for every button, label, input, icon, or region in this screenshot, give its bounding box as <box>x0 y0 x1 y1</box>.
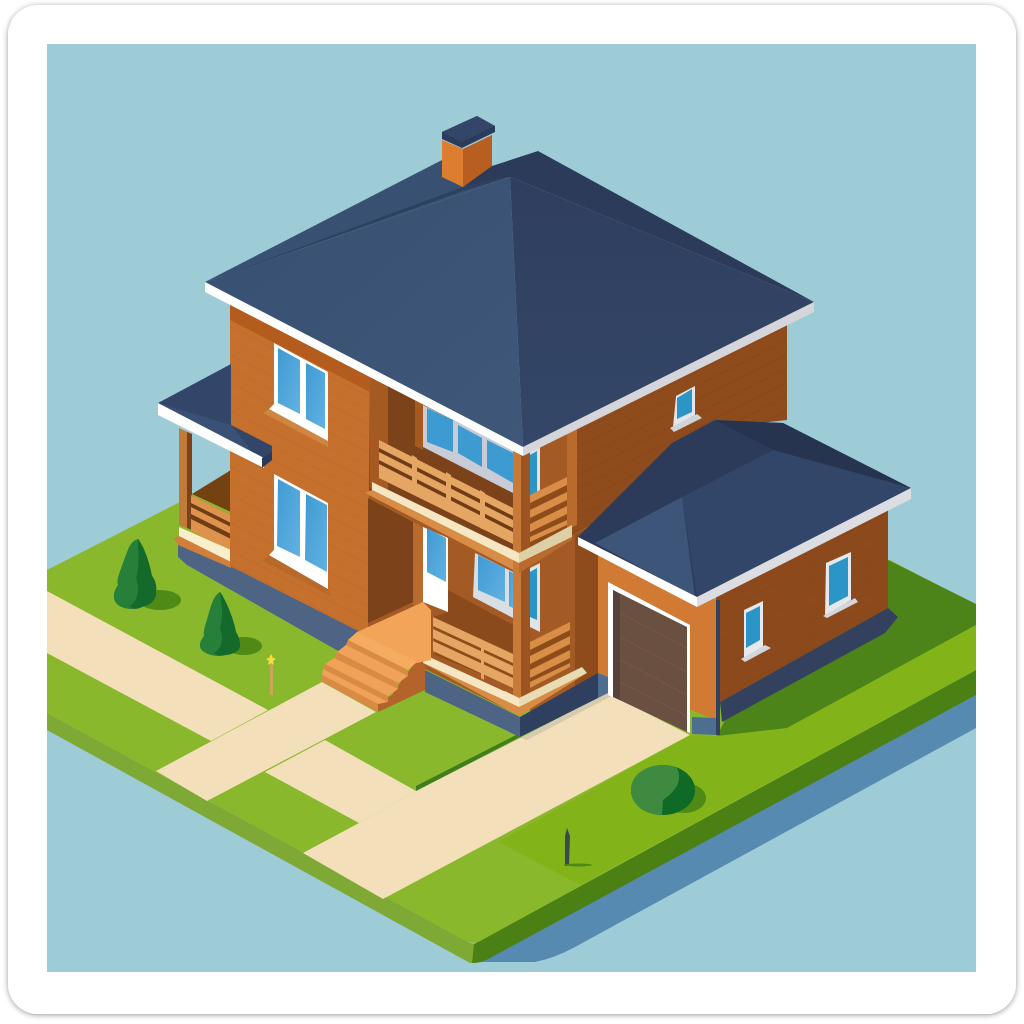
garage foundation <box>692 717 716 735</box>
porch railing <box>191 495 231 552</box>
lower porch railing <box>433 617 513 688</box>
background porch interior <box>192 470 231 512</box>
recess dark entry wall <box>368 498 413 623</box>
front lawn stake <box>564 828 592 866</box>
left wall <box>230 298 370 636</box>
balcony floor <box>365 482 519 573</box>
porch post <box>179 428 192 530</box>
right balcony railing <box>530 477 567 542</box>
garage side wall <box>716 505 888 702</box>
porch post and railing <box>174 428 231 568</box>
lower door <box>423 527 448 612</box>
garage door <box>608 582 690 733</box>
front right slope <box>510 177 814 447</box>
right upper wall siding <box>530 320 787 555</box>
ground and lawn <box>47 470 976 963</box>
balcony railing <box>379 440 513 544</box>
garage large window <box>823 552 858 618</box>
garage side foundation <box>720 608 898 722</box>
left walkway <box>47 591 268 741</box>
entry path <box>156 682 376 801</box>
garage fascia <box>578 537 697 607</box>
balcony window <box>423 405 513 493</box>
centre lawn edge shadow <box>416 733 520 791</box>
dark lawn behind garage <box>717 560 976 736</box>
entry stairs <box>322 602 431 712</box>
upper recess wall <box>368 370 520 560</box>
porch floor <box>423 655 587 716</box>
tree right with shadow <box>200 592 262 656</box>
porch foundation <box>425 670 608 737</box>
driveway shadow <box>520 693 612 740</box>
right lower wall and pillar <box>530 520 598 715</box>
garage small window <box>741 601 771 662</box>
driveway <box>303 693 690 899</box>
balcony floor front strip <box>505 525 572 573</box>
lime lawn band <box>498 625 976 885</box>
garden stake with star <box>266 654 276 695</box>
porch roof cover <box>158 364 272 468</box>
garage <box>598 505 898 735</box>
left upper window <box>263 343 328 447</box>
garage roof <box>578 420 911 607</box>
stair side <box>378 660 425 712</box>
lawn top <box>47 470 976 943</box>
steps <box>348 632 417 670</box>
main roof <box>205 116 814 456</box>
roof fascia <box>205 282 523 456</box>
back left slope <box>205 160 510 282</box>
lower recess wall <box>368 490 520 716</box>
back right slope <box>463 151 814 302</box>
lawn left side edge <box>47 713 482 963</box>
lower window <box>473 553 513 618</box>
right upper narrow window <box>530 447 540 500</box>
side path <box>265 740 416 823</box>
lawn right side edge <box>472 670 976 963</box>
tree left with shadow <box>114 539 181 610</box>
wall pier <box>540 425 577 525</box>
small upper window <box>670 386 702 432</box>
right porch railing <box>530 622 570 688</box>
balcony left post <box>370 372 388 498</box>
hip ridge shadow <box>215 177 510 279</box>
chimney <box>442 116 495 187</box>
lower wall shaded patch <box>433 590 513 655</box>
brown backing of right walls <box>530 312 787 716</box>
front bush <box>631 765 706 815</box>
porch floor front strip <box>505 667 587 707</box>
water strip <box>478 695 976 962</box>
landing <box>357 602 431 663</box>
garage front wall <box>598 550 716 720</box>
corner column <box>513 450 530 700</box>
front left slope <box>205 177 523 447</box>
porch base <box>179 527 231 562</box>
downpipe <box>716 600 720 735</box>
left lower window <box>263 474 332 597</box>
right lower narrow window <box>530 563 540 632</box>
main foundation <box>178 544 368 652</box>
